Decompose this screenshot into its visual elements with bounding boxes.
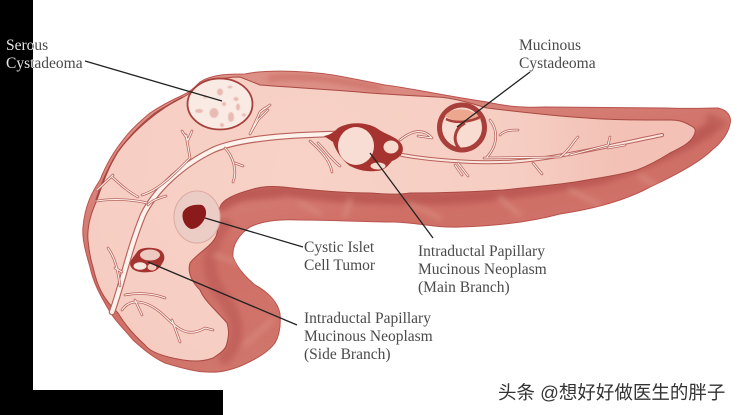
label: serous cystadenoma: Cystadeoma xyxy=(6,55,83,72)
label: side branch IPMN: (Side Branch) xyxy=(304,346,391,363)
label: serous cystadenoma: Serous xyxy=(6,37,48,54)
side branch IPMN cyst xyxy=(130,248,164,272)
label: mucinous cystadenoma: Cystadeoma xyxy=(519,55,596,72)
label: main branch IPMN: Mucinous Neoplasm xyxy=(418,261,547,278)
dark edge of the left lobe xyxy=(96,97,183,200)
watermark: 头条 @想好好做医生的胖子 xyxy=(498,382,725,403)
label: side branch IPMN: Intraductal Papillary xyxy=(304,310,431,327)
leader line: cystic islet cell tumor xyxy=(205,218,303,247)
pancreas illustration xyxy=(83,71,730,372)
main pancreatic duct xyxy=(97,105,662,342)
duct branches xyxy=(97,105,625,342)
pancreas outer tissue xyxy=(83,71,730,372)
serous cystadenoma cyst xyxy=(188,78,252,130)
mucinous cystadenoma cyst xyxy=(440,105,484,150)
label: cystic islet cell tumor: Cell Tumor xyxy=(304,257,376,274)
leader line: mucinous cystadenoma xyxy=(457,72,530,127)
leader line: side branch IPMN xyxy=(148,262,297,325)
label: main branch IPMN: Intraductal Papillary xyxy=(418,243,545,260)
pancreas inner body xyxy=(88,77,695,361)
black left bar xyxy=(0,0,33,390)
leader line: serous cystadenoma xyxy=(85,61,222,101)
label: cystic islet cell tumor: Cystic Islet xyxy=(304,239,375,256)
label: mucinous cystadenoma: Mucinous xyxy=(519,37,581,54)
tissue mottling xyxy=(210,77,722,358)
label: main branch IPMN: (Main Branch) xyxy=(418,279,510,296)
black bottom bar xyxy=(0,390,223,415)
cystic islet cell tumor xyxy=(174,191,220,243)
main branch IPMN cyst xyxy=(324,123,403,171)
label: side branch IPMN: Mucinous Neoplasm xyxy=(304,328,433,345)
leader line: main branch IPMN xyxy=(370,153,433,238)
